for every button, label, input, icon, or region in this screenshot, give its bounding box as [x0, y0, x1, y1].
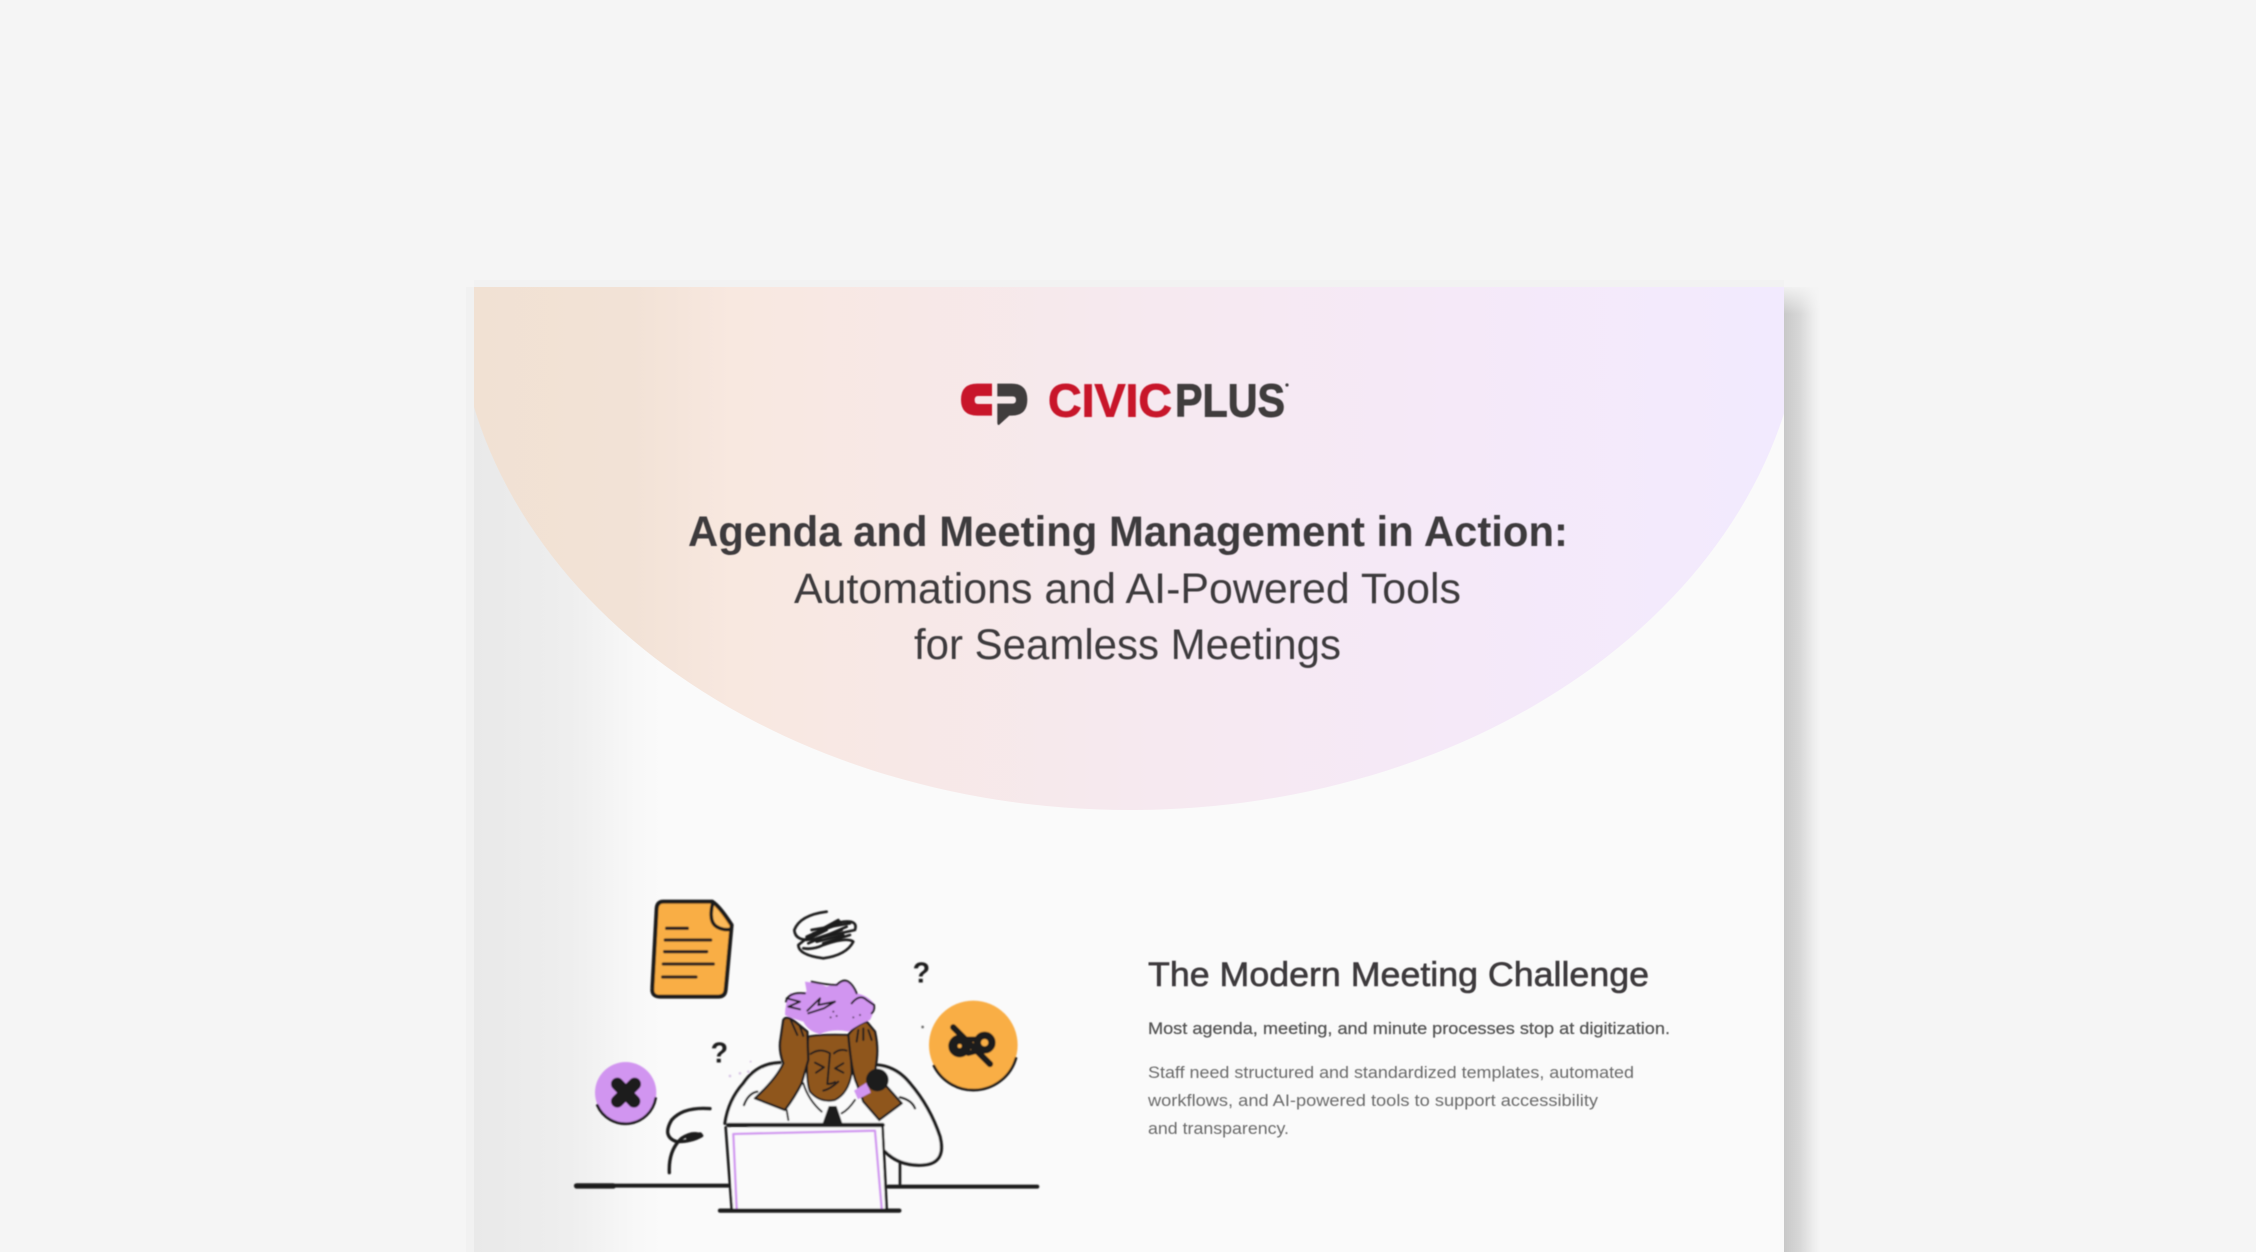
arm left [755, 1018, 808, 1110]
page shadow [466, 280, 1820, 1252]
body paragraph: Staff need structured and standardized templates, automated [1148, 1063, 1634, 1082]
head [807, 1035, 852, 1101]
body paragraph: and transparency. [1148, 1119, 1289, 1138]
table line [576, 1180, 1037, 1193]
laptop [720, 1125, 899, 1211]
panel: document page [474, 287, 1784, 1252]
icon: CivicPlus mark [961, 384, 1027, 425]
watch [854, 1069, 889, 1099]
lead sentence: Most agenda, meeting, and minute processes stop at digitization. [1148, 1019, 1670, 1038]
icon: broken link [929, 1001, 1018, 1090]
title: Automations and AI-Powered Tools [794, 565, 1461, 613]
infographic canvas [474, 287, 1814, 1252]
section heading: The Modern Meeting Challenge [1148, 956, 1649, 994]
body paragraph [1147, 1063, 1634, 1138]
logo wordmark: PLUS [1175, 374, 1285, 426]
icon: document [652, 902, 732, 997]
header arc with gradient [474, 287, 1784, 810]
squiggle [668, 1108, 710, 1173]
icon: cancel x [595, 1062, 656, 1124]
question mark right: ? [913, 958, 930, 990]
logo wordmark [1048, 374, 1289, 426]
body paragraph: workflows, and AI-powered tools to support accessibility [1147, 1091, 1599, 1110]
shirt [725, 1063, 941, 1184]
title: Agenda and Meeting Management in Action: [688, 508, 1568, 556]
specks [729, 1026, 924, 1176]
icon: scribble [794, 912, 856, 958]
title: for Seamless Meetings [914, 621, 1341, 669]
hair [785, 980, 874, 1034]
title [688, 508, 1568, 669]
logo: CivicPlus [961, 374, 1289, 426]
arm right [848, 1022, 902, 1120]
illustration: overwhelmed person at laptop [576, 902, 1037, 1211]
person [720, 980, 941, 1211]
question mark left: ? [711, 1037, 728, 1069]
icons and doodles around the person [576, 902, 1037, 1187]
logo wordmark: CIVIC [1048, 374, 1172, 426]
